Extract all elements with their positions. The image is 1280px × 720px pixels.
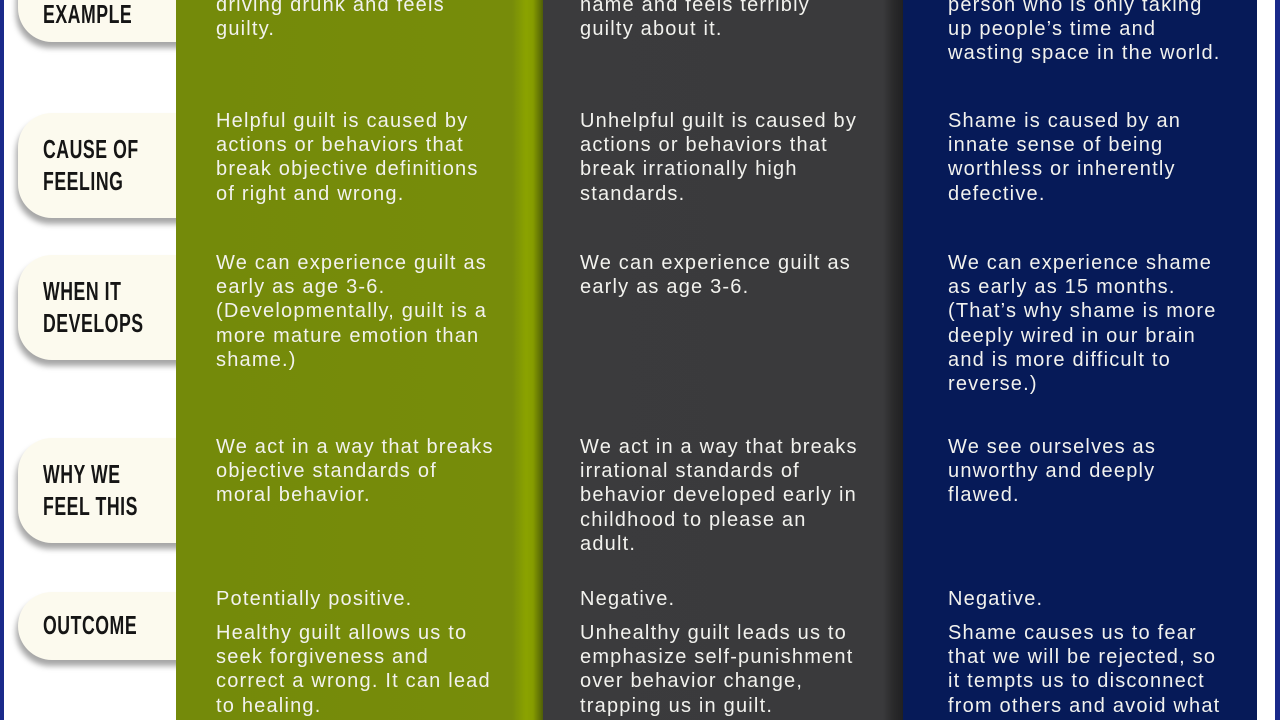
tab: outcome: OUTCOME (43, 610, 137, 640)
tab: cause of feeling: CAUSE OF FEELING (43, 134, 139, 196)
text: outcome: Potentially positive. (216, 588, 412, 610)
text: cause: Helpful guilt is caused by actions or behaviors that break objective definitions of right and wrong. (216, 110, 479, 205)
panel: unhelpful guilt column (543, 0, 905, 720)
tab: when it develops: WHEN IT DEVELOPS (43, 276, 144, 338)
text: cause: Unhelpful guilt is caused by actions or behaviors that break irrationally high standards. (580, 110, 857, 205)
text: when: We can experience guilt as early as age 3-6. (580, 252, 851, 298)
panel: unhelpful guilt column: Unhealthy guilt leads us to emphasize self-punishment over behavior change, trapping us in guilt. (580, 622, 853, 717)
right border (1275, 0, 1280, 720)
tab: when it develops (18, 255, 188, 360)
text: outcome: Negative. (580, 588, 675, 610)
text: why: We act in a way that breaks irrational standards of behavior developed early in childhood to please an adult. (580, 436, 858, 555)
text: when: We can experience shame as early as 15 months. (That’s why shame is more deeply wired in our brain and is more difficult to reverse.) (948, 252, 1217, 395)
panel: helpful guilt column: Healthy guilt allows us to seek forgiveness and correct a wrong. It can lead to healing. (216, 622, 491, 717)
panel: helpful guilt column (176, 0, 543, 720)
panel: shame column (903, 0, 1257, 720)
text: why: We see ourselves as unworthy and deeply flawed. (948, 436, 1156, 506)
text: why: We act in a way that breaks objective standards of moral behavior. (216, 436, 494, 506)
text: when: We can experience guilt as early as age 3-6. (Developmentally, guilt is a more mature emotion than shame.) (216, 252, 487, 371)
left border (0, 0, 4, 720)
text: cause: Shame is caused by an innate sense of being worthless or inherently defective. (948, 110, 1181, 205)
text: outcome: Negative. (948, 588, 1043, 610)
tab: why we feel this (18, 438, 188, 543)
tab: why we feel this: WHY WE FEEL THIS (43, 459, 138, 521)
tab: example (18, 0, 188, 42)
tab: outcome (18, 592, 188, 660)
panel: shame column: Shame causes us to fear that we will be rejected, so it tempts us to disconnect from others and avoid what (948, 622, 1220, 717)
tab: cause of feeling (18, 113, 188, 218)
